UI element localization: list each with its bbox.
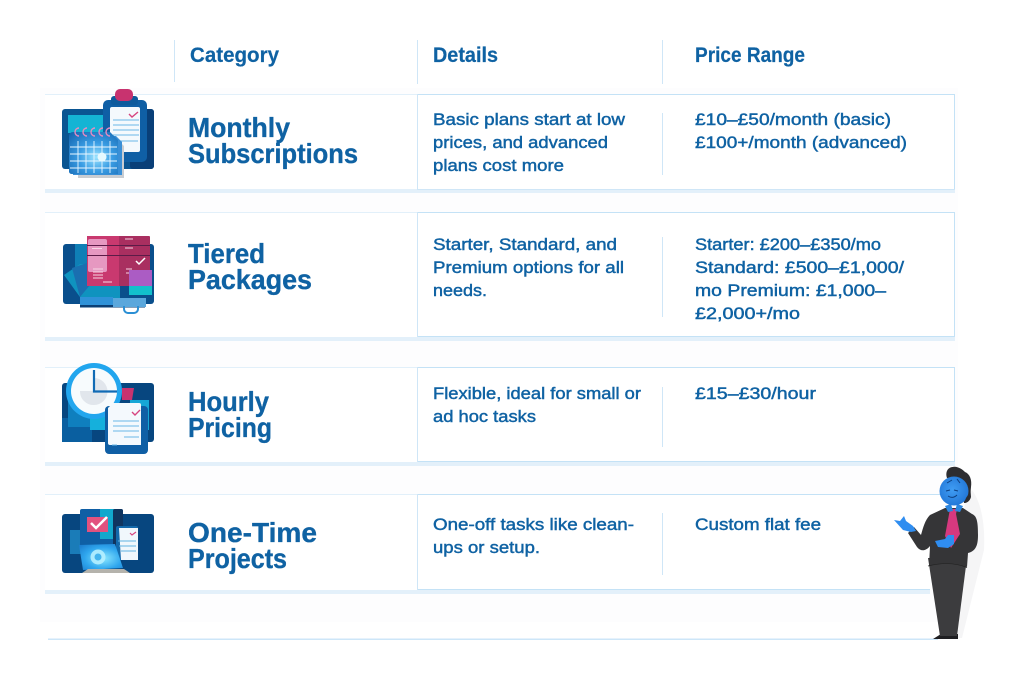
heading: Details: Details (433, 44, 498, 67)
icon: laptop and checklist (62, 509, 154, 573)
title: Hourly Pricing: Pricing (188, 412, 272, 443)
figure shoes (933, 634, 958, 639)
price: Monthly Subscriptions: £10–£50/month (basic) (695, 111, 891, 129)
title: One-Time Projects: Projects (188, 543, 287, 574)
details: Tiered Packages (433, 236, 624, 300)
price: Tiered Packages: £2,000+/mo (695, 305, 800, 323)
figure collar (945, 504, 963, 512)
figure hands (894, 516, 916, 532)
details: Monthly Subscriptions: plans cost more (433, 157, 564, 175)
title: One-Time Projects (188, 517, 317, 574)
icon: packages box (63, 236, 154, 313)
title: Monthly Subscriptions (188, 112, 358, 169)
panel: Tiered Packages (45, 212, 955, 341)
price: Tiered Packages: mo Premium: £1,000– (695, 282, 887, 300)
table header (174, 40, 805, 84)
figure tie (945, 509, 960, 548)
price: Monthly Subscriptions (695, 111, 907, 152)
figure jacket (908, 508, 978, 567)
icon: calendar and clipboard (62, 89, 154, 178)
figure shadow (955, 490, 984, 638)
details: Monthly Subscriptions: prices, and advanced (433, 134, 608, 152)
panel: One-Time Projects (45, 494, 950, 594)
details: Hourly Pricing: ad hoc tasks (433, 408, 536, 426)
price: Hourly Pricing: £15–£30/hour (695, 385, 817, 403)
details: One-Time Projects (433, 516, 634, 557)
figure: presenter in suit (894, 467, 984, 639)
title: One-Time Projects: One-Time (188, 517, 317, 548)
icon: clock and document (62, 363, 154, 454)
soft table backdrop (40, 88, 958, 622)
title: Hourly Pricing: Hourly (188, 386, 270, 417)
title: Monthly Subscriptions: Monthly (188, 112, 291, 143)
price: Monthly Subscriptions: £100+/month (advanced) (695, 134, 907, 152)
heading: Price Range: Price Range (695, 44, 805, 67)
details: Hourly Pricing: Flexible, ideal for small or (433, 385, 642, 403)
panel: Monthly Subscriptions (45, 89, 955, 193)
price: One-Time Projects: Custom flat fee (695, 516, 821, 534)
figure trousers (928, 558, 967, 636)
details: Monthly Subscriptions (433, 111, 625, 175)
title: Monthly Subscriptions: Subscriptions (188, 138, 358, 169)
details: Tiered Packages: needs. (433, 282, 487, 300)
title: Tiered Packages: Packages (188, 264, 312, 295)
price: Tiered Packages (695, 236, 904, 323)
figure head (940, 476, 968, 506)
title: Tiered Packages (188, 238, 312, 295)
title: Hourly Pricing (188, 386, 272, 443)
panel: Hourly Pricing (45, 363, 955, 466)
price: Tiered Packages: Starter: £200–£350/mo (695, 236, 881, 254)
price: Tiered Packages: Standard: £500–£1,000/ (695, 259, 904, 277)
details: Monthly Subscriptions: Basic plans start at low (433, 111, 625, 129)
details: Hourly Pricing (433, 385, 642, 426)
details: One-Time Projects: ups or setup. (433, 539, 540, 557)
title: Tiered Packages: Tiered (188, 238, 265, 269)
details: Tiered Packages: Starter, Standard, and (433, 236, 617, 254)
heading: Category: Category (190, 44, 279, 67)
figure hair (946, 467, 971, 503)
details: Tiered Packages: Premium options for all (433, 259, 624, 277)
details: One-Time Projects: One-off tasks like clean- (433, 516, 634, 534)
